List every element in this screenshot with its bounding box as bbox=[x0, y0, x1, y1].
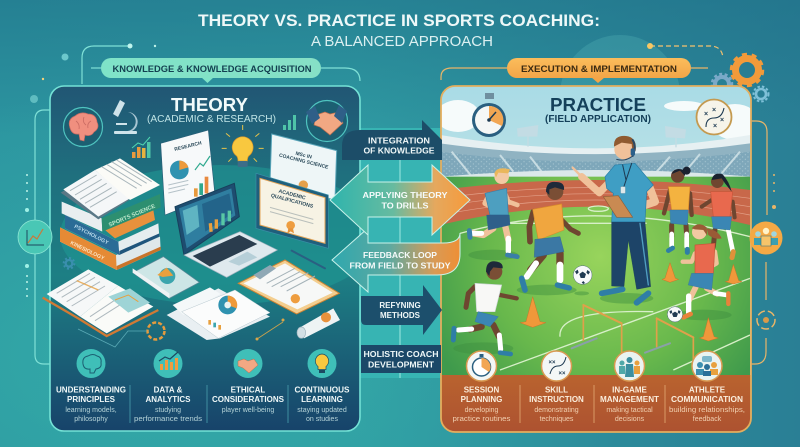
icon: pen bbox=[292, 251, 325, 268]
arrow: integration of knowledge: INTEGRATION bbox=[368, 136, 430, 146]
book stack bbox=[60, 194, 161, 270]
item: athlete communication: feedback bbox=[693, 416, 722, 423]
book stack: KINESIOLOGY bbox=[69, 240, 105, 262]
running track bbox=[440, 180, 750, 225]
book stack: SPORTS SCIENCE bbox=[108, 203, 157, 229]
panel: theory bbox=[43, 86, 380, 431]
pill: knowledge and knowledge acquisition bbox=[101, 58, 321, 83]
player: blond runner bbox=[469, 168, 517, 257]
icon: tactics board bbox=[696, 100, 732, 134]
item: session planning: practice routines bbox=[452, 416, 511, 423]
arrow: integration of knowledge: OF KNOWLEDGE bbox=[364, 146, 435, 156]
item: skill instruction: ×× bbox=[558, 371, 566, 377]
field bbox=[440, 177, 750, 377]
arrow: feedback loop from field to study: FROM FIELD TO STUDY bbox=[350, 262, 451, 270]
title: A BALANCED APPROACH bbox=[311, 34, 493, 50]
bottom items: theory bbox=[56, 349, 350, 423]
heading: theory: (ACADEMIC & RESEARCH) bbox=[147, 114, 276, 125]
icon: right small gear ring bbox=[757, 311, 775, 329]
item: session planning: PLANNING bbox=[461, 395, 502, 404]
pill: execution and implementation bbox=[507, 58, 691, 83]
item: athlete communication: COMMUNICATION bbox=[671, 395, 743, 404]
small book bbox=[133, 257, 199, 298]
arrow: refining methods bbox=[361, 285, 442, 335]
item: continuous learning: staying updated bbox=[297, 407, 347, 414]
icon: tactics board: × bbox=[713, 123, 717, 130]
icon: brain bbox=[64, 108, 102, 146]
item: in-game management: decisions bbox=[615, 416, 645, 423]
player: red shirt dark hair bbox=[702, 174, 735, 258]
item: ethical considerations: player well-being bbox=[222, 407, 274, 414]
cones bbox=[520, 263, 742, 341]
box: holistic coach development: HOLISTIC COACH bbox=[364, 350, 439, 359]
icon: tactics board: × bbox=[720, 117, 724, 124]
certificate: MSc bbox=[270, 134, 337, 200]
research report bbox=[161, 130, 215, 215]
item: in-game management: MANAGEMENT bbox=[600, 395, 659, 404]
item: skill instruction: ×× bbox=[548, 360, 556, 366]
stadium stands bbox=[442, 135, 750, 177]
item: in-game management: making tactical bbox=[606, 407, 653, 414]
bottom items: practice bbox=[452, 351, 745, 423]
arrow: applying theory to drills: TO DRILLS bbox=[382, 202, 429, 210]
bottom band bbox=[441, 375, 751, 432]
certificate: academic qualifications: QUALIFICATIONS bbox=[270, 193, 314, 210]
item: in-game management: IN-GAME bbox=[612, 386, 647, 394]
icon: light bulb bbox=[222, 125, 264, 167]
floodlights bbox=[517, 125, 686, 147]
icon: small bar chart top right bbox=[283, 115, 296, 130]
arrow: applying theory to drills: APPLYING THEORY bbox=[362, 191, 448, 200]
pill: knowledge and knowledge acquisition: KNOWLEDGE & KNOWLEDGE ACQUISITION bbox=[112, 64, 312, 75]
heading: practice: PRACTICE bbox=[550, 94, 646, 115]
title: THEORY VS. PRACTICE IN SPORTS COACHING: bbox=[198, 12, 600, 30]
panel: practice bbox=[436, 86, 759, 432]
item: skill instruction: demonstrating bbox=[534, 407, 579, 414]
open book top bbox=[61, 158, 160, 219]
item: session planning: SESSION bbox=[464, 386, 500, 394]
item: skill instruction: INSTRUCTION bbox=[529, 395, 584, 404]
icon: tactics board: × bbox=[704, 111, 708, 118]
item: data and analytics bbox=[134, 349, 203, 423]
item: data and analytics: studying bbox=[155, 407, 181, 414]
hurdles bbox=[570, 304, 694, 360]
item: ethical considerations: CONSIDERATIONS bbox=[212, 395, 285, 404]
desk illustrations bbox=[43, 125, 340, 340]
item: data and analytics: performance trends bbox=[134, 416, 203, 423]
item: skill instruction: SKILL bbox=[545, 386, 568, 394]
item: in-game management bbox=[600, 351, 659, 423]
heading: theory: THEORY bbox=[171, 94, 249, 115]
centre column backdrop bbox=[355, 128, 445, 378]
item: continuous learning: CONTINUOUS bbox=[294, 386, 350, 394]
coach bbox=[573, 136, 655, 303]
field lines bbox=[460, 206, 750, 370]
arrow: integration of knowledge bbox=[342, 120, 442, 160]
player: yellow shirt with bun bbox=[664, 167, 692, 252]
pill: execution and implementation: EXECUTION & IMPLEMENTATION bbox=[521, 64, 677, 75]
heading: practice: (FIELD APPLICATION) bbox=[545, 114, 651, 125]
book stack: PSYCHOLOGY bbox=[73, 224, 110, 247]
item: understanding principles: philosophy bbox=[74, 416, 108, 423]
item: athlete communication: ATHLETE bbox=[689, 386, 726, 394]
item: continuous learning bbox=[294, 349, 350, 423]
player: orange shirt bbox=[522, 182, 578, 290]
balls bbox=[573, 266, 683, 322]
centre arrows bbox=[330, 120, 470, 373]
heading: theory bbox=[147, 94, 276, 125]
player: white shirt runner bbox=[453, 261, 517, 354]
arrow: feedback loop from field to study: FEEDBACK LOOP bbox=[363, 251, 438, 260]
open book lower bbox=[43, 269, 158, 336]
icon: orange and blue gears bbox=[712, 54, 768, 102]
heading: practice bbox=[545, 94, 651, 125]
icon: tactics board: × bbox=[712, 107, 716, 114]
item: understanding principles: UNDERSTANDING bbox=[56, 386, 126, 394]
item: understanding principles: learning models, bbox=[65, 407, 117, 414]
item: athlete communication bbox=[669, 351, 745, 423]
item: athlete communication: building relationships, bbox=[669, 407, 745, 414]
arrow: feedback loop from field to study bbox=[332, 228, 460, 292]
icon: microscope bbox=[113, 100, 138, 134]
item: understanding principles: PRINCIPLES bbox=[67, 395, 116, 404]
player: girl with brown ponytail bbox=[683, 224, 728, 317]
shadows bbox=[453, 250, 732, 354]
item: session planning bbox=[452, 351, 511, 423]
box: holistic coach development: DEVELOPMENT bbox=[368, 360, 434, 370]
icon: left side chart badge bbox=[18, 220, 52, 254]
icon: right side people badge bbox=[750, 222, 782, 254]
icon: clouds bbox=[436, 100, 759, 140]
item: ethical considerations: ETHICAL bbox=[231, 386, 265, 394]
research report: RESEARCH bbox=[174, 140, 203, 153]
item: skill instruction: techniques bbox=[540, 416, 574, 423]
scroll with ribbon bbox=[297, 308, 340, 338]
item: understanding principles bbox=[56, 349, 126, 423]
arrow: refining methods: REFYNING bbox=[379, 301, 421, 310]
icon: growth chart bbox=[132, 137, 150, 158]
clipboard bbox=[238, 260, 339, 314]
box: holistic coach development bbox=[361, 345, 441, 373]
certificate: MSc: COACHING SCIENCE bbox=[278, 153, 330, 171]
item: data and analytics: DATA & bbox=[154, 386, 183, 394]
arrow: applying theory to drills bbox=[330, 165, 470, 235]
icon: handshake bbox=[306, 100, 348, 142]
item: data and analytics: ANALYTICS bbox=[145, 395, 191, 404]
item: ethical considerations bbox=[212, 349, 285, 414]
icon: laptop bbox=[175, 183, 277, 277]
icon: orange ring and lines bbox=[78, 318, 284, 347]
icon: stopwatch bbox=[472, 93, 506, 137]
arrow: refining methods: METHODS bbox=[380, 311, 421, 320]
icon: gear bbox=[64, 258, 74, 269]
certificate: MSc: MSc IN bbox=[295, 151, 313, 161]
left decorative connector lines bbox=[25, 44, 360, 364]
decorative dots bbox=[26, 45, 776, 297]
item: continuous learning: LEARNING bbox=[301, 395, 343, 404]
certificate: academic qualifications: ACADEMIC bbox=[278, 189, 306, 202]
right decorative connector lines bbox=[441, 43, 767, 364]
item: continuous learning: on studies bbox=[306, 416, 338, 423]
certificate: academic qualifications bbox=[256, 173, 328, 248]
papers bbox=[167, 287, 270, 340]
item: skill instruction bbox=[529, 351, 584, 423]
title bbox=[198, 12, 600, 50]
item: session planning: developing bbox=[465, 407, 499, 414]
